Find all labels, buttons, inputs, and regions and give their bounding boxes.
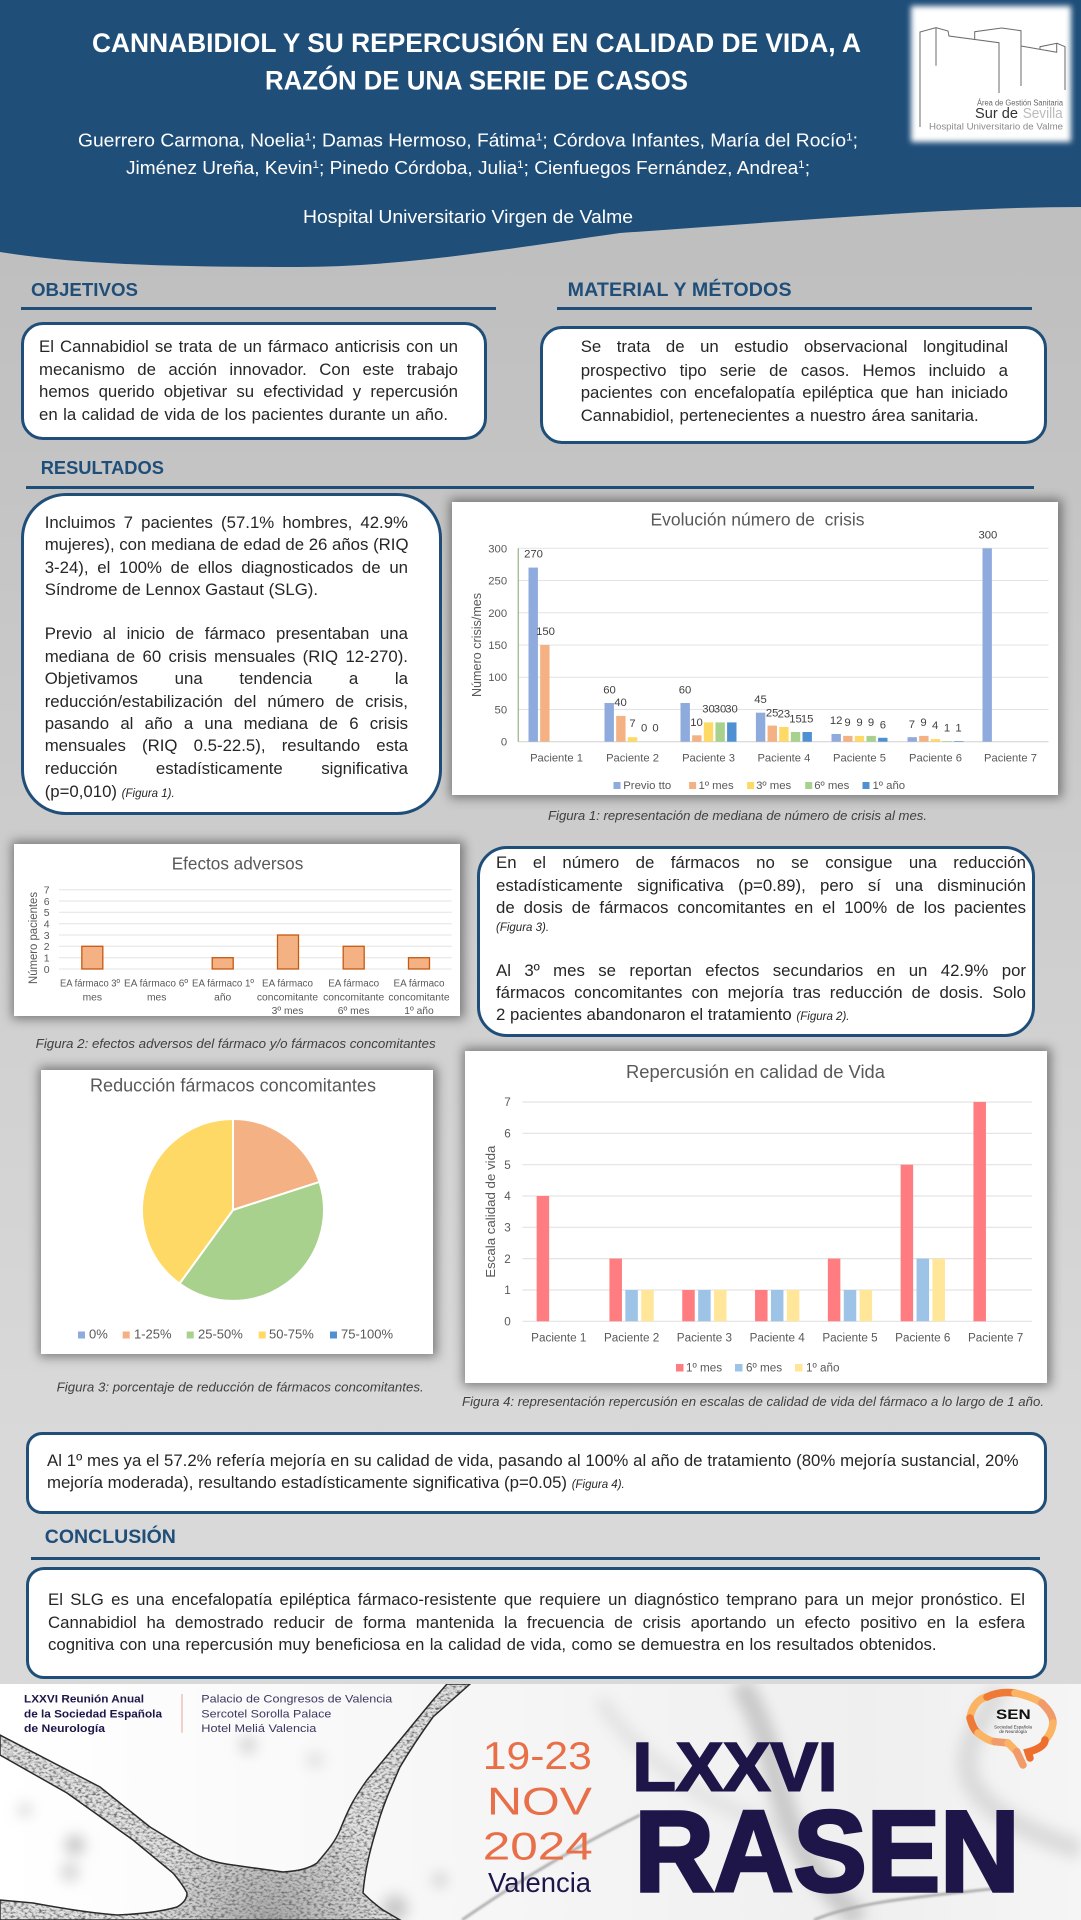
title: CANNABIDIOL Y SU REPERCUSIÓN EN CALIDAD DE VIDA, A (92, 28, 861, 58)
y axis: 50 (494, 704, 507, 716)
event dates: NOV (487, 1780, 592, 1823)
legend: 1º año (806, 1362, 840, 1375)
data labels: 9 (844, 717, 850, 729)
category labels: Paciente 2 (606, 753, 658, 765)
data labels: 40 (614, 697, 626, 709)
heading: conclusión: CONCLUSIÓN (45, 1526, 176, 1548)
panel: fármacos concomitantes texto: 2 pacientes abandonaron el tratamiento (Figura 2). (496, 1005, 849, 1024)
chart title: Evolución número de crisis (650, 510, 864, 530)
chart title: Repercusión en calidad de Vida (626, 1061, 886, 1082)
event dates: 19-23 (483, 1735, 592, 1778)
data labels: 9 (920, 717, 926, 729)
blurred background neurons (19, 1684, 1080, 1920)
data labels: 7 (908, 719, 915, 731)
bars (82, 935, 429, 969)
category labels: EA fármaco 6º (124, 979, 188, 990)
authors: 1 (305, 132, 311, 144)
legend: 1º mes (686, 1362, 722, 1375)
data labels: 45 (754, 694, 766, 706)
chart: efectos adversos: Número pacientes (26, 892, 40, 984)
authors: 1 (798, 159, 805, 171)
title (92, 28, 861, 96)
header band (0, 0, 1081, 267)
data labels: 9 (856, 717, 862, 729)
y axis: 4 (504, 1190, 511, 1203)
legend: 6º mes (814, 780, 849, 792)
data labels: 4 (932, 720, 938, 732)
y axis: 6 (504, 1127, 511, 1140)
category labels: Paciente 3 (677, 1332, 732, 1345)
y axis: 0 (500, 737, 507, 749)
y axis: 300 (488, 543, 507, 555)
event venues: Sercotel Sorolla Palace (201, 1708, 331, 1720)
banner: congreso (0, 1684, 1081, 1920)
chart: efectos adversos (14, 844, 460, 1016)
category labels: Paciente 1 (531, 1332, 586, 1345)
event info left: de Neurología (24, 1723, 106, 1735)
category labels: Paciente 7 (984, 753, 1036, 765)
category labels: EA fármaco 1º (192, 979, 254, 990)
y axis: 6 (44, 897, 50, 908)
bars (528, 548, 991, 742)
y axis: 2 (504, 1253, 511, 1266)
panel: fármacos concomitantes texto (477, 846, 1035, 1037)
panel: material y métodos: prospectivo tipo serie de casos. Hemos incluido a (581, 361, 1008, 380)
category labels: concomitante (388, 993, 450, 1004)
legend: 6º mes (746, 1362, 782, 1375)
data labels: 23 (777, 708, 790, 720)
data labels: 270 (524, 549, 542, 561)
legend (78, 1327, 393, 1342)
legend: 75-100% (341, 1327, 393, 1342)
panel: resultados texto: Previo al inicio de fármaco presentaban una (45, 624, 408, 643)
panel: calidad de vida texto: Al 1º mes ya el 57.2% refería mejoría en su calidad de vida, pasando al 100% al año de tratamiento (80% mejoría sustancial, 20% (47, 1451, 1019, 1470)
data labels: 300 (978, 530, 997, 542)
panel: resultados texto: reducción estadísticamente significativa (45, 759, 408, 778)
panel: fármacos concomitantes texto: (Figura 3). (496, 922, 549, 934)
panel: calidad de vida texto: mejoría moderada), resultando estadísticamente significativa (p=0.05) (Figura 4). (47, 1472, 625, 1492)
panel: objetivos: hemos querido objetivar su efectividad y repercusión (39, 382, 458, 401)
logo: SEN: SEN (996, 1706, 1031, 1722)
panel: fármacos concomitantes texto: de dosis de fármacos concomitantes en el 100% de los pacientes (496, 898, 1026, 917)
category labels (531, 1332, 1023, 1345)
legend: 0% (89, 1327, 108, 1342)
data labels: 1 (955, 723, 961, 735)
data labels: 30 (713, 704, 726, 716)
data labels: 15 (789, 714, 801, 726)
data labels: 150 (536, 626, 554, 638)
category labels: Paciente 1 (530, 753, 582, 765)
y axis: 100 (488, 672, 507, 684)
panel: material y métodos: pacientes con encefalopatía epiléptica que han iniciado (581, 383, 1008, 402)
panel: objetivos: El Cannabidiol se trata de un fármaco anticrisis con un (39, 337, 458, 356)
panel: conclusión: Cannabidiol ha demostrado reducir de forma mantenida la frecuencia de crisis aportando un efecto positivo en la esfera (48, 1612, 1025, 1632)
authors: ; (853, 131, 858, 151)
data labels: 60 (603, 684, 615, 696)
chart title: Reducción fármacos concomitantes (90, 1076, 376, 1096)
panel: objetivos: mecanismo de acción innovador. Con este trabajo (39, 360, 458, 379)
panel: fármacos concomitantes texto: fármacos concomitantes con mejoría tras reducción de dosis. Solo (496, 983, 1026, 1002)
legend: 25-50% (198, 1327, 243, 1342)
y axis (504, 1096, 511, 1328)
data labels: 1 (943, 723, 950, 735)
panel: resultados texto: pasando al año a una mediana de 6 crisis (45, 714, 408, 733)
panel: resultados texto (21, 493, 442, 815)
category labels: concomitante (323, 993, 385, 1004)
data labels: 25 (765, 708, 778, 720)
authors: 1 (536, 132, 542, 144)
authors: 1 (313, 159, 319, 171)
category labels: mes (147, 993, 166, 1004)
y axis: 4 (44, 919, 50, 930)
panel: objetivos: en la calidad de vida de los pacientes durante un año. (39, 405, 448, 424)
heading: resultados: RESULTADOS (41, 457, 164, 478)
y axis: 3 (44, 931, 50, 942)
data labels: 6 (879, 720, 886, 732)
logo: hospital: Área de Gestión Sanitaria (977, 98, 1064, 108)
category labels: Paciente 6 (895, 1332, 950, 1345)
title: RAZÓN DE UNA SERIE DE CASOS (265, 66, 688, 96)
caption: figura 4: Figura 4: representación repercusión en escalas de calidad de vida del fármaco a lo largo de 1 año. (462, 1395, 1044, 1409)
logo: hospital: Sur de (975, 106, 1018, 122)
legend (676, 1362, 840, 1375)
event venues (201, 1694, 393, 1735)
panel: resultados texto: (p=0,010) (Figura 1). (45, 782, 175, 800)
panel: resultados texto: 3-24), el 100% de ellos diagnosticados de un (45, 558, 408, 576)
data labels: 0 (652, 723, 658, 735)
y axis: 3 (504, 1221, 511, 1234)
panel: fármacos concomitantes texto: Al 3º mes se reportan efectos secundarios en un 42.9% por (496, 961, 1026, 980)
authors: Guerrero Carmona, Noelia (78, 131, 290, 151)
chart title: Efectos adversos (172, 853, 303, 873)
category labels: EA fármaco 3º (60, 979, 120, 990)
y axis: 0 (504, 1315, 511, 1328)
category labels: Paciente 3 (682, 753, 734, 765)
panel: resultados texto: mediana de 60 crisis mensuales (RIQ 12-270). (45, 647, 408, 666)
authors: ; Córdova Infantes, María del Rocío (542, 131, 846, 151)
panel: resultados texto: mensuales (RIQ 0.5-22.5), resultando esta (45, 736, 408, 755)
panel: material y métodos (540, 326, 1047, 444)
legend: 1-25% (134, 1327, 172, 1342)
caption: figura 1: Figura 1: representación de mediana de número de crisis al mes. (548, 809, 927, 823)
logo: hospital: Hospital Universitario de Valme (929, 122, 1063, 132)
logo: hospital: Sevilla (1023, 106, 1064, 122)
panel: conclusión: El SLG es una encefalopatía epiléptica fármaco-resistente que requiere un diagnóstico temprano para un mejor pronóstico. El (48, 1590, 1025, 1609)
category labels: Paciente 7 (968, 1332, 1023, 1345)
y axis: 7 (504, 1096, 511, 1109)
authors: Jiménez Ureña, Kevin (126, 158, 302, 178)
authors: ; (805, 158, 810, 178)
y axis: 150 (488, 640, 507, 652)
y axis (488, 543, 507, 749)
caption: figura 2: Figura 2: efectos adversos del fármaco y/o fármacos concomitantes (36, 1037, 436, 1051)
neuron (0, 1684, 480, 1920)
category labels: Paciente 6 (909, 753, 961, 765)
category labels: año (214, 993, 232, 1004)
event venues: Palacio de Congresos de Valencia (201, 1694, 393, 1706)
category labels: Paciente 5 (833, 753, 885, 765)
data labels: 9 (867, 717, 874, 729)
chart: repercusión en calidad de vida (465, 1051, 1047, 1383)
panel: fármacos concomitantes texto: estadísticamente significativa (p=0.89), pero sí una disminución (496, 876, 1026, 895)
chart: reducción fármacos concomitantes (41, 1070, 433, 1354)
legend (613, 780, 905, 792)
category labels: mes (83, 993, 102, 1004)
legend: 50-75% (269, 1327, 314, 1342)
logo: hospital (906, 1, 1076, 147)
chart: evolución número de crisis: Número crisis/mes (470, 593, 484, 697)
panel: resultados texto: reducción/estabilización del número de crisis, (45, 692, 408, 711)
legend: Previo tto (623, 780, 671, 792)
legend: 1º mes (698, 780, 733, 792)
category labels: Paciente 2 (604, 1332, 659, 1345)
authors: ; Damas Hermoso, Fátima (311, 131, 537, 151)
category labels: concomitante (257, 993, 318, 1004)
bars (537, 1102, 986, 1321)
thin neuron branches (462, 1815, 1000, 1920)
category labels (60, 979, 450, 1017)
event dates: 2024 (483, 1825, 593, 1868)
event info left (24, 1694, 163, 1735)
panel: material y métodos: Cannabidiol, pertenecientes a nuestro área sanitaria. (581, 406, 979, 425)
panel: resultados texto: Incluimos 7 pacientes (57.1% hombres, 42.9% (45, 512, 408, 532)
event name: RASEN (634, 1788, 1020, 1916)
panel: resultados texto: Objetivamos una tendencia a la (45, 669, 408, 688)
authors: ; Cienfuegos Fernández, Andrea (524, 158, 799, 178)
y axis: 2 (44, 942, 50, 953)
panel: calidad de vida texto (26, 1432, 1047, 1514)
y axis: 7 (44, 885, 50, 896)
data labels: 7 (629, 718, 635, 730)
legend: 3º mes (756, 780, 791, 792)
y axis: 250 (488, 575, 507, 587)
y axis (44, 885, 50, 976)
panel: resultados texto: Síndrome de Lennox Gastaut (SLG). (45, 580, 318, 599)
panel: conclusión: cognitiva con una repercusión muy beneficiosa en la calidad de vida, como se demuestra en los resultados obtenidos. (48, 1635, 937, 1654)
data labels: 0 (640, 723, 647, 735)
data labels: 30 (702, 704, 714, 716)
event city: Valencia (488, 1867, 591, 1898)
y axis: 200 (488, 608, 507, 620)
chart: evolución número de crisis (452, 502, 1058, 795)
data labels: 60 (678, 684, 691, 696)
event name: LXXVI (632, 1729, 838, 1806)
data labels: 10 (690, 717, 702, 729)
data labels: 30 (725, 704, 737, 716)
panel: resultados texto: mujeres), con mediana de edad de 26 años (RIQ (45, 535, 408, 554)
logo: SEN: Sociedad Española (994, 1724, 1032, 1730)
category labels: Paciente 4 (757, 753, 810, 765)
y axis: 5 (44, 908, 50, 919)
chart: repercusión en calidad de vida: Escala calidad de vida (483, 1145, 498, 1278)
data labels: 12 (829, 715, 842, 727)
event dates (483, 1735, 593, 1868)
heading: material y métodos: MATERIAL Y MÉTODOS (568, 278, 792, 300)
legend: 1º año (872, 780, 905, 792)
y axis: 1 (44, 953, 50, 964)
heading: objetivos: OBJETIVOS (31, 278, 138, 300)
category labels: EA fármaco (262, 979, 313, 990)
panel: objetivos (21, 322, 487, 440)
category labels: Paciente 5 (822, 1332, 878, 1345)
category labels (530, 753, 1036, 765)
authors: 1 (517, 159, 524, 171)
y axis: 0 (44, 965, 50, 976)
category labels: EA fármaco (393, 979, 445, 990)
event info left: de la Sociedad Española (24, 1708, 163, 1720)
event name (632, 1729, 1020, 1916)
data labels: 15 (800, 714, 813, 726)
event venues: Hotel Meliá Valencia (201, 1723, 317, 1735)
event info left: LXXVI Reunión Anual (24, 1694, 144, 1706)
caption: figura 3: Figura 3: porcentaje de reducción de fármacos concomitantes. (57, 1381, 424, 1395)
category labels: Paciente 4 (750, 1332, 805, 1345)
category labels: EA fármaco (328, 979, 379, 990)
data labels (524, 530, 997, 735)
affiliation: Hospital Universitario Virgen de Valme (303, 207, 633, 227)
panel: material y métodos: Se trata de un estudio observacional longitudinal (581, 337, 1008, 356)
authors: 1 (846, 132, 853, 144)
logo: SEN (970, 1692, 1053, 1765)
authors (78, 131, 858, 178)
authors: ; Pinedo Córdoba, Julia (319, 158, 518, 178)
y axis: 1 (504, 1284, 511, 1297)
panel: fármacos concomitantes texto: En el número de fármacos no se consigue una reducción (496, 852, 1026, 872)
y axis: 5 (504, 1159, 511, 1172)
pie (142, 1119, 324, 1301)
logo: SEN: de Neurología (999, 1729, 1027, 1734)
